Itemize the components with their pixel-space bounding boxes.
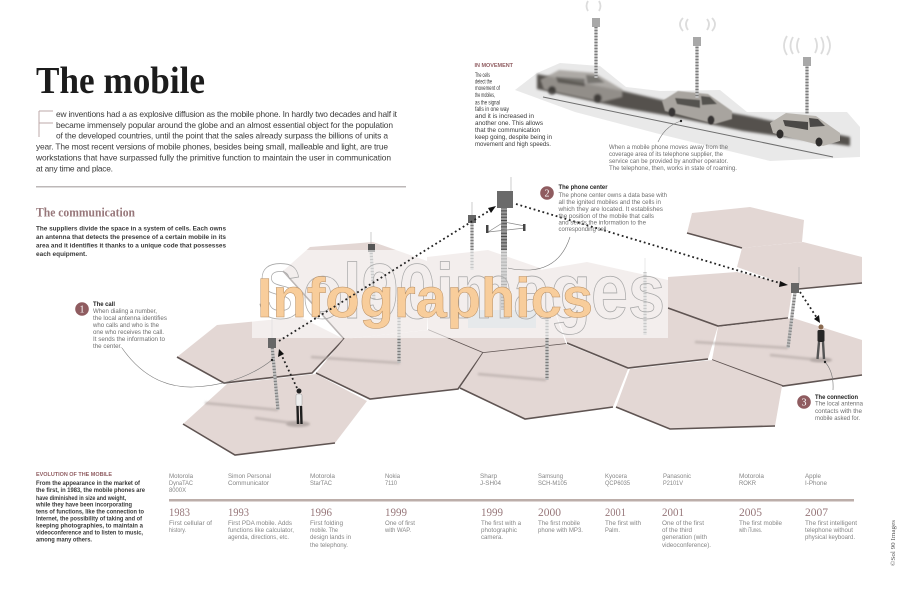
intro text block (35, 109, 398, 174)
road kerb line (543, 97, 833, 157)
timeline entry 1983: DynaTAC (169, 481, 194, 487)
watermark orange text: Infographics (257, 266, 593, 329)
timeline entry 1999 Sharp: 1999 (481, 505, 503, 519)
timeline entry 1983: Motorola (169, 474, 194, 480)
timeline entry 2007: 2007 (805, 505, 828, 519)
timeline entry 2001 Panasonic: Panasonic (663, 474, 691, 480)
person making the call (286, 388, 310, 427)
timeline entry 1983 (169, 474, 212, 534)
callout: the call: one who receives the call. (93, 330, 164, 336)
timeline entry 1999 Nokia: One of first (385, 521, 415, 527)
text block: in movement: movement and high speeds. (475, 141, 551, 148)
timeline entry 2001 Kyocera: QCP6035 (605, 481, 631, 487)
text block: communication intro: each equipment. (36, 251, 87, 258)
timeline entry 2005: ROKR (739, 481, 757, 487)
text block: in movement: the mobiles, (475, 92, 495, 99)
car 1, blurred (540, 70, 622, 102)
callout: the phone center (508, 185, 667, 270)
timeline entry 2001 Panasonic: videoconference). (662, 543, 711, 549)
timeline entry 2000: phone with MP3. (538, 528, 583, 534)
text block: evolution of the mobile: tens of functions, like the connection to (36, 508, 144, 516)
panel: hexagonal cell network (177, 177, 862, 455)
callout: the call: 1 (80, 304, 84, 316)
callout: the connection: The local antenna (815, 402, 864, 408)
timeline entry 1999 Sharp (480, 474, 522, 541)
text block: evolution of the mobile (35, 472, 146, 544)
timeline entry 1999 Nokia (384, 474, 415, 534)
text block: in movement (474, 63, 553, 148)
central phone tower (468, 191, 536, 328)
tower shadows (205, 342, 820, 424)
road (537, 74, 850, 146)
timeline entry 2005: with iTunes. (738, 528, 762, 534)
callout: the phone center: which they are located. It establishes (557, 207, 663, 213)
person receiving the call (810, 324, 832, 362)
timeline entry 2001 Panasonic: 2001 (662, 505, 684, 519)
callout: the connection (797, 361, 864, 422)
credit: ©Sol 90 Images (890, 519, 897, 566)
icon: drop cap F (39, 111, 53, 137)
timeline entry 1996: the telephony. (310, 543, 348, 549)
timeline entry 1999 Nokia: with WAP. (384, 528, 411, 534)
back cell hexagons (283, 242, 718, 368)
callout: the phone center: all the ignited mobiles and the cells in (558, 200, 661, 206)
antenna towers (268, 177, 799, 410)
callout: the phone center: corresponding cell. (558, 227, 608, 233)
timeline entry 2000: 2000 (538, 505, 561, 519)
title: The mobile (36, 60, 205, 102)
timeline entry 2001 Kyocera: The first with (605, 521, 641, 527)
timeline entry 2007: telephone without (805, 528, 853, 534)
timeline entry 2001 Panasonic: generation (with (662, 535, 707, 541)
timeline entry 2001 Panasonic: One of the first (662, 521, 704, 527)
timeline entry 2001 Panasonic: P2101V (663, 481, 683, 487)
text block: evolution of the mobile: Internet, the possibility of taking and of (36, 516, 143, 522)
timeline entry 2001 Kyocera: Kyocera (605, 474, 628, 480)
timeline entry 2000 (538, 474, 583, 534)
timeline entry 2005 (738, 474, 783, 534)
callout: the call: The call (93, 302, 115, 308)
timeline entry 1983: 1983 (169, 505, 190, 519)
intro text block: ew inventions had a as explosive diffusion as the mobile phone. In hardly two decades and half it (56, 109, 398, 119)
text block: in movement: that the communication (475, 127, 541, 134)
timeline entry 1999 Sharp: camera. (481, 535, 503, 541)
text block: evolution of the mobile: keeping photographies, to maintain a (36, 522, 144, 530)
panel: road scene in movement (515, 1, 860, 161)
right upper hexagons (668, 207, 862, 386)
text block: roaming note (609, 145, 737, 172)
intro text block: workstations that have surpassed fully the primitive function to maintain the user in communication (35, 152, 391, 162)
text block: communication intro: The suppliers divide the space in a system of cells. Each owns (36, 226, 227, 232)
timeline entry 2007 (805, 474, 857, 541)
intro text block: at any time and place. (36, 164, 113, 174)
timeline entry 2007: physical keyboard. (805, 535, 855, 541)
watermark outline text: Sol90images (258, 247, 665, 335)
timeline entry 1993 (228, 474, 294, 541)
timeline entry 1999 Nokia: Nokia (385, 474, 401, 480)
roadside towers (592, 18, 811, 114)
callout: the phone center: 2 (544, 188, 550, 200)
timeline entry 1983: 8000X (169, 488, 186, 494)
text block: in movement: falls in one way (475, 106, 510, 113)
text block: evolution of the mobile: among many others. (36, 536, 92, 544)
intro text block: became immensely popular around the globe and an almost essential object for the population (56, 120, 393, 130)
text block: in movement: movement of (475, 85, 500, 92)
car 2, slightly blurred (662, 91, 732, 124)
timeline entry 2007: I-Phone (805, 481, 828, 487)
text block: in movement: and it is increased in (475, 113, 535, 120)
callout: the phone center: The phone center owns a data base with (558, 193, 667, 199)
text block: communication intro: area and it identifies it thanks to a unique code that possesses (36, 242, 227, 250)
timeline entry 1996: First folding (310, 521, 343, 527)
timeline entry 1993: agenda, directions, etc. (228, 535, 289, 541)
timeline entry 2007: The first intelligent (805, 521, 857, 527)
timeline entry 1983: history. (169, 528, 186, 534)
timeline entry 2001 Kyocera (605, 474, 641, 534)
timeline entry 2001 Panasonic (662, 474, 711, 549)
timeline entry 1999 Sharp: The first with a (481, 521, 522, 527)
timeline entry 1993: First PDA mobile. Adds (228, 521, 292, 527)
watermark veil (252, 250, 668, 338)
text block: roaming note: The telephone, then, works in state of roaming. (609, 166, 737, 172)
timeline entry 2001 Kyocera: Palm. (605, 528, 620, 534)
callout: the call: It sends the information to (93, 337, 166, 343)
callout: the call (75, 302, 273, 387)
car 3 (770, 113, 840, 146)
callout: the phone center: the position of the mobile that calls (558, 214, 654, 220)
text block: roaming note: When a mobile phone moves away from the (609, 145, 729, 151)
text block: evolution of the mobile: EVOLUTION OF THE MOBILE (36, 472, 112, 478)
timeline entry 1993: Communicator (228, 481, 269, 487)
timeline entry 2001 Panasonic: of the third (662, 528, 692, 534)
text block: roaming note: service can be provided by another operator. (609, 159, 728, 165)
timeline entry 1999 Sharp: photographic (481, 528, 517, 534)
text block: in movement: another one. This allows (475, 120, 543, 127)
callout: the phone center: and sends the information to the (558, 220, 647, 226)
text block: in movement: keep going, despite being in (475, 134, 553, 141)
text block: in movement: detect the (475, 78, 492, 86)
callout: the call: the local antenna identifies (93, 316, 167, 322)
timeline entry 2005: The first mobile (739, 521, 783, 527)
timeline entry 1996: Motorola (310, 474, 336, 480)
callout: the call: When dialing a number, (93, 309, 157, 315)
timeline entry 1993: Simon Personal (228, 474, 271, 480)
heading: the communication: The communication (36, 206, 135, 220)
text block: evolution of the mobile: have diminished in size and weight, (36, 495, 126, 502)
timeline entry 2000: Samsung (538, 474, 563, 480)
timeline entry 1999 Sharp: J-SH04 (480, 481, 502, 487)
dotted signal arrows (278, 204, 820, 388)
text block: communication intro: an antenna that detects the presence of a certain mobile in its (36, 234, 227, 241)
intro text block: year. The most recent versions of mobile phones, besides being small, malleable and light, are true (36, 142, 388, 152)
text block: evolution of the mobile: From the appearance in the market of (36, 480, 141, 487)
text block: in movement: The cells (475, 72, 490, 79)
callout: the connection: mobile asked for. (815, 416, 860, 422)
front hexagons (177, 317, 782, 455)
timeline entry 2000: SCH-M105 (538, 481, 568, 487)
timeline entry 1999 Nokia: 7110 (385, 481, 398, 487)
timeline entry 1996: StarTAC (310, 481, 333, 487)
timeline entry 2007: Apple (805, 474, 822, 480)
text block: in movement: as the signal (475, 100, 500, 106)
pale ground hexagons (515, 63, 860, 161)
callout: the connection: 3 (802, 398, 806, 408)
leader line with dot (658, 121, 681, 142)
timeline entry 1993: 1993 (228, 505, 249, 519)
text block: evolution of the mobile: videoconference and to listen to music, (36, 530, 143, 536)
timeline entry 1996: mobile. The (310, 528, 339, 534)
timeline entry 1983: First cellular of (169, 521, 212, 527)
text block: evolution of the mobile: while they have been incorporating (35, 502, 132, 508)
callout: the connection: The connection (815, 395, 858, 401)
timeline entry 1996: 1996 (310, 505, 332, 519)
text block: roaming note: coverage area of its telephone supplier, the (609, 152, 724, 158)
timeline entry 2001 Kyocera: 2001 (605, 505, 626, 519)
text block: in movement: IN MOVEMENT (474, 63, 514, 69)
callout: the connection: contacts with the (815, 409, 863, 415)
icon: signal waves (586, 1, 830, 55)
text block: communication intro (36, 226, 227, 258)
timeline entry 2000: The first mobile (538, 521, 581, 527)
timeline entry 2005: 2005 (739, 505, 762, 519)
timeline entry 1996 (310, 474, 351, 549)
timeline bar (169, 499, 854, 502)
timeline entry 1999 Sharp: Sharp (480, 474, 498, 480)
timeline entry 1996: design lands in (310, 535, 351, 541)
timeline entry 2005: Motorola (739, 474, 765, 480)
callout: the phone center: The phone center (558, 185, 608, 191)
timeline entry 1999 Nokia: 1999 (385, 505, 407, 519)
intro text block: of the developed countries, until the point that the sales already surpass the billions of units a (56, 130, 388, 140)
callout: the call: who calls and who is the (92, 323, 160, 329)
timeline entry 1993: functions like calculator, (228, 528, 294, 534)
text block: evolution of the mobile: the first, in 1983, the mobile phones are (36, 487, 146, 494)
callout: the call: the center. (93, 344, 122, 350)
